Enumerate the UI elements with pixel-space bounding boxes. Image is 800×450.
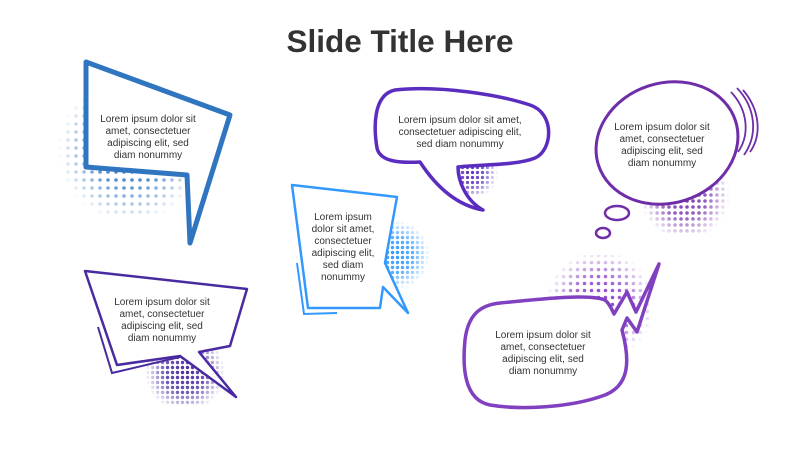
halftone — [548, 255, 654, 348]
text block: Lorem ipsum dolor sit — [100, 114, 196, 125]
title: Slide Title Here — [286, 23, 514, 59]
text block: amet, consectetuer — [619, 134, 705, 145]
text block: Lorem ipsum dolor sit — [614, 122, 710, 133]
halftone: blue dots — [60, 98, 182, 214]
text block: adipiscing elit, sed — [121, 321, 203, 332]
text block: nonummy — [321, 272, 365, 283]
text block: amet, consectetuer — [119, 309, 205, 320]
text block: Lorem ipsum dolor sit — [114, 297, 210, 308]
text block: amet, consectetuer — [105, 126, 191, 137]
text block: adipiscing elit, sed — [107, 138, 189, 149]
text block: consectetuer — [314, 236, 372, 247]
text block: consectetuer adipiscing elit, — [399, 127, 521, 138]
halftone: light blue dots — [386, 221, 429, 288]
text block: amet, consectetuer — [500, 342, 586, 353]
text block: sed diam nonummy — [416, 139, 504, 150]
text block: diam nonummy — [128, 333, 196, 344]
halftone: purple dots — [146, 350, 224, 404]
icon: thought dots — [605, 206, 629, 220]
text block: adipiscing elit, sed — [621, 146, 703, 157]
text block: adipiscing elit, sed — [502, 354, 584, 365]
panel: thought bubble top-right — [594, 80, 759, 240]
panel: purple speech bubble top-center — [375, 89, 549, 210]
text block: Lorem ipsum dolor sit amet, — [398, 115, 522, 126]
panel: light blue angular bubble center — [292, 185, 430, 314]
text block: adipiscing elit, — [312, 248, 374, 259]
panel: blue angular bubble top-left — [55, 62, 230, 243]
halftone — [460, 166, 498, 194]
text block: diam nonummy — [114, 150, 182, 161]
text block: Lorem ipsum dolor sit — [495, 330, 591, 341]
panel: purple angular bubble bottom-left — [85, 271, 247, 405]
halftone — [644, 176, 729, 233]
text block: diam nonummy — [509, 366, 577, 377]
panel: jagged speech bubble bottom-right — [464, 255, 660, 408]
text block: diam nonummy — [628, 158, 696, 169]
text block: Lorem ipsum — [314, 212, 372, 223]
text block: dolor sit amet, — [312, 224, 374, 235]
icon: motion arcs — [731, 88, 758, 155]
text block: sed diam — [323, 260, 363, 271]
